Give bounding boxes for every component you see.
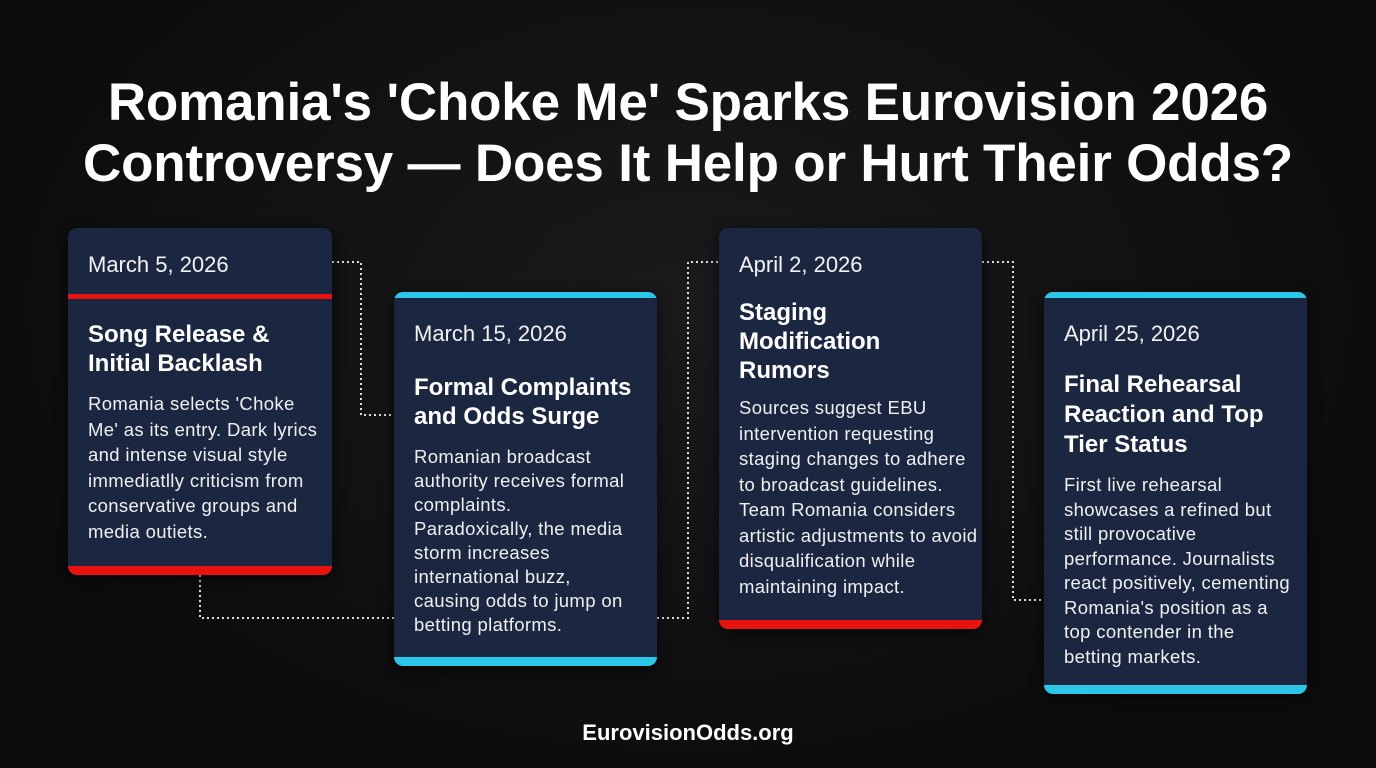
date 3: April 2, 2026 (739, 252, 863, 277)
heading 4: Reaction and Top (1064, 401, 1264, 428)
text 4: betting markets. (1064, 646, 1201, 666)
heading 2: Formal Complaints (414, 374, 631, 401)
heading 3: Staging (739, 299, 827, 326)
date 2: March 15, 2026 (414, 321, 567, 346)
text 3: intervention requesting (739, 422, 934, 444)
text 4: still provocative (1064, 523, 1196, 544)
text 1: Romania selects 'Choke (88, 393, 295, 414)
text 2: storm increases (414, 542, 550, 563)
title (83, 73, 1293, 193)
text 1: conservative groups and (88, 495, 298, 516)
text 3 (739, 397, 977, 597)
text 3: disqualification while (739, 550, 915, 571)
heading 1 (88, 321, 269, 377)
text 3: Sources suggest EBU (739, 397, 927, 418)
footer: EurovisionOdds.org (582, 720, 794, 745)
text 1: and intense visual style (88, 444, 288, 465)
heading 4 (1064, 371, 1264, 458)
heading 1: Initial Backlash (88, 350, 263, 377)
text 3: to broadcast guidelines. (739, 474, 943, 494)
text 1: media outiets. (88, 520, 208, 542)
card 1 (68, 228, 332, 575)
text 1: Me' as its entry. Dark lyrics (88, 418, 317, 440)
heading 1: Song Release & (88, 321, 269, 348)
title: Controversy — Does It Help or Hurt Their Odds? (83, 134, 1293, 193)
heading 2: and Odds Surge (414, 403, 599, 430)
text 2: Paradoxically, the media (414, 518, 623, 539)
title: Romania's 'Choke Me' Sparks Eurovision 2026 (108, 73, 1268, 132)
text 2: causing odds to jump on (414, 590, 623, 611)
text 2 (414, 446, 624, 635)
card 2 (394, 292, 657, 666)
text 3: staging changes to adhere (739, 448, 966, 469)
text 1: immediatlly criticism from (88, 470, 304, 490)
text 2: Romanian broadcast (414, 446, 591, 467)
heading 3: Rumors (739, 357, 830, 384)
card 3 (719, 228, 982, 629)
heading 4: Tier Status (1064, 431, 1188, 458)
heading 3: Modification (739, 328, 880, 355)
text 4: performance. Journalists (1064, 548, 1275, 568)
text 4: react positively, cementing (1064, 572, 1290, 593)
text 3: Team Romania considers (739, 499, 955, 520)
text 2: international buzz, (414, 566, 571, 587)
card 4 (1044, 292, 1307, 694)
text 2: betting platforms. (414, 614, 562, 635)
heading 3 (739, 299, 880, 384)
text 4: top contender in the (1064, 621, 1235, 642)
text 1 (88, 393, 317, 542)
date 4: April 25, 2026 (1064, 321, 1200, 346)
text 3: maintaining impact. (739, 576, 905, 596)
text 3: artistic adjustments to avoid (739, 524, 977, 546)
heading 2 (414, 374, 631, 430)
text 2: complaints. (414, 494, 511, 515)
text 2: authority receives formal (414, 470, 624, 491)
text 4: First live rehearsal (1064, 474, 1222, 495)
text 4 (1064, 474, 1290, 667)
text 4: Romania's position as a (1064, 596, 1268, 618)
text 4: showcases a refined but (1064, 498, 1272, 520)
heading 4: Final Rehearsal (1064, 371, 1241, 398)
date 1: March 5, 2026 (88, 252, 229, 277)
